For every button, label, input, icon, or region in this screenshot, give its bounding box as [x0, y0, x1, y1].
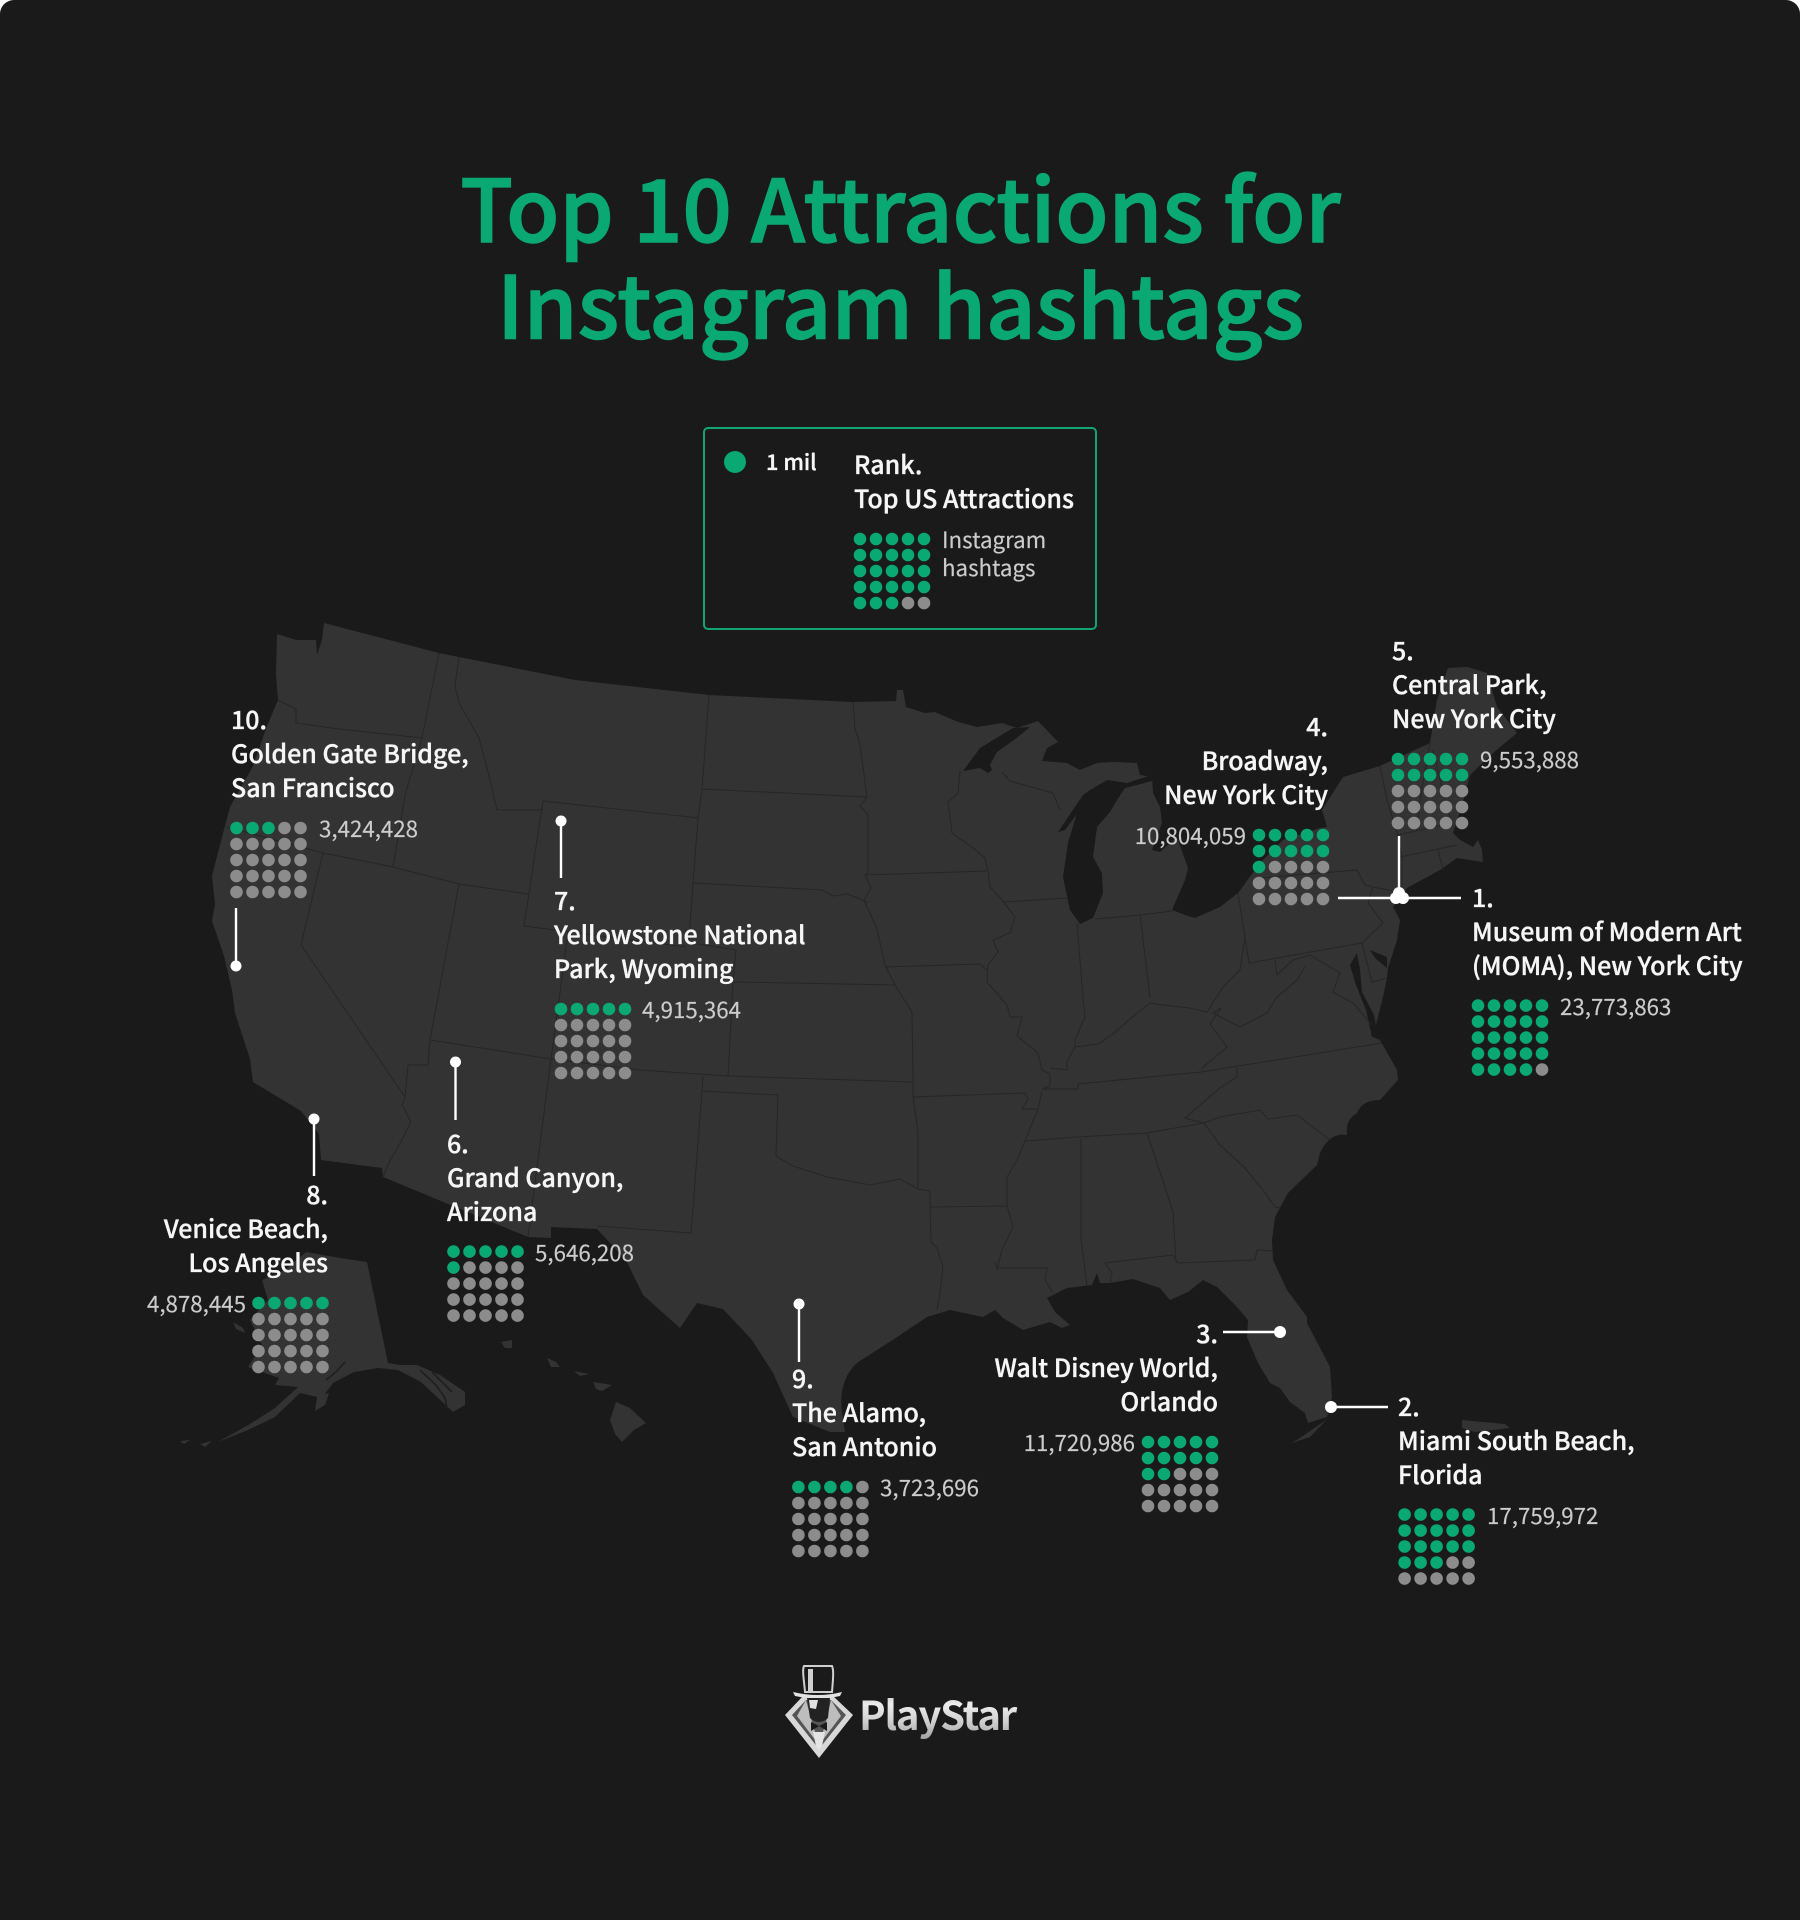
- legend: one million label: 1 mil: [766, 446, 817, 477]
- callout 9: The Alamo: 3,723,696: [880, 1471, 979, 1503]
- callout 10: Golden Gate Bridge: [230, 701, 469, 972]
- logo: PlayStar: [785, 1666, 1018, 1758]
- callout 4: Broadway: Broadway,: [1202, 742, 1328, 778]
- callout 7: Yellowstone National Park: [553, 816, 805, 1073]
- callout 3: Walt Disney World: 11,720,986: [1024, 1426, 1135, 1458]
- map: Alaska: [218, 1252, 465, 1442]
- callout 2: Miami South Beach: 17,759,972: [1487, 1499, 1598, 1531]
- callout 3: Walt Disney World: [994, 1315, 1286, 1506]
- callout 8: Venice Beach: Venice Beach,: [163, 1210, 328, 1246]
- callout 4: Broadway: 4.: [1306, 708, 1328, 744]
- callout 4: Broadway: New York City: [1164, 776, 1328, 812]
- callout 4: Broadway: [1135, 708, 1402, 904]
- callout 3: Walt Disney World: Orlando: [1120, 1383, 1218, 1419]
- callout 7: Yellowstone National Park: Yellowstone National: [553, 916, 805, 952]
- callout 9: The Alamo: [792, 1298, 979, 1551]
- legend: instagram hashtags label: Instagram: [942, 523, 1046, 555]
- map: contiguous states land: [212, 623, 1517, 1432]
- map: Hawaii: [501, 1340, 646, 1442]
- map: great lakes and bays: [963, 727, 1387, 1037]
- callout 4: Broadway: 10,804,059: [1135, 819, 1246, 851]
- callout 8: Venice Beach: 4,878,445: [147, 1287, 246, 1319]
- callout 5: Central Park: [1392, 632, 1579, 899]
- callout 1: Museum of Modern Art: Museum of Modern Art: [1472, 913, 1742, 949]
- callout 1: Museum of Modern Art: 23,773,863: [1560, 990, 1671, 1022]
- title: [460, 142, 1341, 364]
- callout 5: Central Park: Central Park,: [1392, 666, 1547, 702]
- callout 1: Museum of Modern Art: [1397, 879, 1743, 1070]
- callout 2: Miami South Beach: 2.: [1398, 1388, 1420, 1424]
- callout 1: Museum of Modern Art: (MOMA), New York City: [1472, 947, 1743, 983]
- legend panel: [704, 428, 1096, 629]
- callout 8: Venice Beach: [147, 1114, 328, 1367]
- callout 6: Grand Canyon: 6.: [447, 1125, 469, 1161]
- callout 2: Miami South Beach: Miami South Beach,: [1398, 1422, 1635, 1458]
- title: Top 10 Attractions for: [460, 142, 1341, 267]
- callout 1: Museum of Modern Art: 1.: [1472, 879, 1494, 915]
- legend: rank text: [854, 446, 1074, 516]
- callout 6: Grand Canyon: [447, 1056, 634, 1316]
- callout 10: Golden Gate Bridge: San Francisco: [231, 769, 395, 805]
- legend: rank text: Rank.: [854, 446, 922, 482]
- legend: dot grid: [860, 539, 924, 603]
- callout 2: Miami South Beach: Florida: [1398, 1456, 1483, 1492]
- callout 5: Central Park: 9,553,888: [1480, 743, 1579, 775]
- legend: instagram hashtags label: [942, 523, 1046, 583]
- callout 7: Yellowstone National Park: 7.: [554, 882, 576, 918]
- callout 10: Golden Gate Bridge: Golden Gate Bridge,: [231, 735, 469, 771]
- map of the United States: [180, 623, 1517, 1447]
- callout 8: Venice Beach: 8.: [306, 1176, 328, 1212]
- callout 10: Golden Gate Bridge: 10.: [231, 701, 267, 737]
- legend: instagram hashtags label: hashtags: [942, 551, 1036, 583]
- callout 6: Grand Canyon: Grand Canyon,: [447, 1159, 623, 1195]
- callout 7: Yellowstone National Park: Park, Wyoming: [554, 950, 734, 986]
- legend: one million dot: [724, 451, 746, 473]
- title: Instagram hashtags: [497, 238, 1304, 364]
- callout 3: Walt Disney World: Walt Disney World,: [994, 1349, 1218, 1385]
- logo wordmark: PlayStar: [859, 1684, 1018, 1742]
- callout 10: Golden Gate Bridge: 3,424,428: [319, 812, 418, 844]
- legend: rank text: Top US Attractions: [854, 480, 1074, 516]
- map: state borders: [227, 653, 1457, 1310]
- callout 8: Venice Beach: Los Angeles: [189, 1244, 328, 1280]
- callout 5: Central Park: New York City: [1392, 700, 1556, 736]
- callout 9: The Alamo: 9.: [792, 1360, 814, 1396]
- callout 2: Miami South Beach: [1325, 1388, 1635, 1578]
- callout 6: Grand Canyon: 5,646,208: [535, 1236, 634, 1268]
- map: Kodiak, Aleutian, Florida Keys and Puerto Rico islands: [180, 1322, 1510, 1447]
- callout 3: Walt Disney World: 3.: [1196, 1315, 1218, 1351]
- callout 9: The Alamo: The Alamo,: [792, 1394, 926, 1430]
- map: Alaska panhandle channels: [326, 1362, 452, 1408]
- callout 7: Yellowstone National Park: 4,915,364: [642, 993, 741, 1025]
- callout 5: Central Park: 5.: [1392, 632, 1414, 668]
- icon: top-hat gentleman in a diamond: [785, 1666, 853, 1758]
- callout 6: Grand Canyon: Arizona: [447, 1193, 537, 1229]
- callout 9: The Alamo: San Antonio: [792, 1428, 937, 1464]
